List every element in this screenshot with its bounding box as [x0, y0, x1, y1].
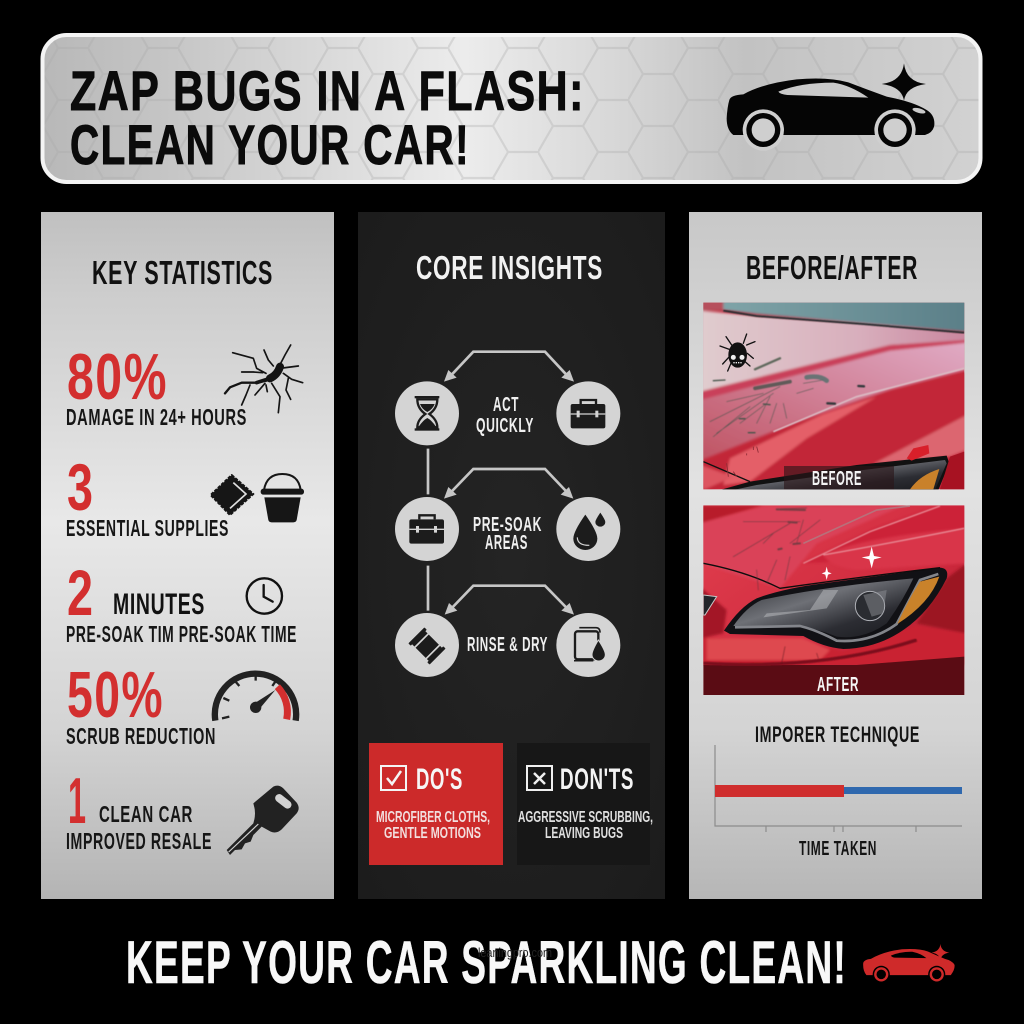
- card: do's: GENTLE MOTIONS: [384, 825, 481, 842]
- bug splatter: [710, 358, 864, 437]
- text: rinse and dry: RINSE & DRY: [467, 634, 548, 656]
- icon: sparkling car: [727, 63, 934, 151]
- text: pre-soak areas: PRE-SOAK: [473, 514, 542, 536]
- panel: core insights: [358, 212, 665, 899]
- icon: hourglass: [395, 381, 459, 445]
- icon: red car: [863, 944, 955, 983]
- text: pre-soak areas: [473, 514, 542, 554]
- icon: bucket: [261, 474, 304, 522]
- heading: key statistics: KEY STATISTICS: [92, 254, 273, 291]
- icon: cracked paint: [225, 345, 303, 413]
- stat: 80%: 80%: [67, 340, 168, 413]
- chart axis label: TIME TAKEN: [799, 838, 877, 860]
- icon: clock: [247, 578, 282, 614]
- icon: folded cloth: [395, 613, 459, 677]
- stat: 1 clean car: 1: [68, 764, 86, 837]
- icon: toolbox left: [395, 497, 459, 561]
- icon: cloth: [211, 475, 253, 515]
- caption band: before: [784, 466, 894, 489]
- arrows: [428, 352, 574, 615]
- chart heading: IMPORER TECHNIQUE: [755, 722, 920, 747]
- card: do's: DO'S: [416, 763, 463, 796]
- title: [70, 59, 585, 176]
- stat: 1 clean car: CLEAN CAR: [99, 801, 193, 827]
- stat: 3 supplies: [66, 450, 229, 541]
- heading: before/after: BEFORE/AFTER: [746, 249, 918, 286]
- bar chart: [715, 745, 962, 832]
- text: act quickly: QUICKLY: [476, 415, 534, 437]
- flow diagram: [395, 352, 620, 677]
- stat: 80%: [66, 340, 247, 430]
- label: before: BEFORE: [812, 468, 862, 490]
- text: pre-soak areas: AREAS: [485, 532, 528, 554]
- icon: towel with drop: [556, 613, 620, 677]
- headlamp: [724, 568, 947, 649]
- headlamp: [720, 456, 949, 490]
- heading: core insights: CORE INSIGHTS: [416, 249, 603, 286]
- title: ZAP BUGS IN A FLASH:: [70, 59, 585, 122]
- photo: before: [700, 300, 967, 490]
- label: after: AFTER: [817, 674, 859, 696]
- stat: 3 supplies: 3: [67, 450, 93, 524]
- stat: 2 minutes: [66, 557, 297, 647]
- title: CLEAN YOUR CAR!: [70, 113, 470, 176]
- stat: 50%: 50%: [67, 658, 164, 731]
- stat: 2 minutes: 2: [67, 557, 93, 629]
- residue marks: [733, 508, 820, 663]
- stat: 80%: DAMAGE IN 24+ HOURS: [66, 404, 247, 430]
- watermark text: leaningpro.com: [478, 945, 552, 960]
- stat: 1 clean car: [66, 764, 212, 854]
- text: act quickly: ACT: [493, 394, 519, 416]
- icon: water drops: [556, 497, 620, 561]
- stat: 1 clean car: IMPROVED RESALE: [66, 828, 212, 854]
- panel: before and after: [689, 212, 982, 899]
- panel: key statistics: [41, 212, 334, 899]
- card: do's: MICROFIBER CLOTHS,: [376, 809, 490, 826]
- header banner: [42, 35, 980, 182]
- photo: after: [700, 505, 967, 695]
- icon: toolbox: [556, 381, 620, 445]
- stat: 2 minutes: MINUTES: [113, 588, 205, 621]
- card: don'ts: AGGRESSIVE SCRUBBING,: [518, 809, 653, 826]
- sparkles: [822, 547, 882, 580]
- icon: bug: [720, 334, 755, 371]
- stat: 2 minutes: PRE-SOAK TIM PRE-SOAK TIME: [66, 621, 297, 647]
- card: don'ts: LEAVING BUGS: [545, 825, 623, 842]
- stat: 3 supplies: ESSENTIAL SUPPLIES: [66, 515, 229, 541]
- card: do's: [369, 743, 503, 865]
- icon: car key: [227, 786, 299, 855]
- card: don'ts: DON'TS: [560, 763, 634, 796]
- card: don'ts: [517, 743, 653, 865]
- stat: 50%: SCRUB REDUCTION: [66, 723, 216, 749]
- text: act quickly: [476, 394, 534, 437]
- icon: gauge: [215, 674, 296, 721]
- footer: [126, 929, 955, 996]
